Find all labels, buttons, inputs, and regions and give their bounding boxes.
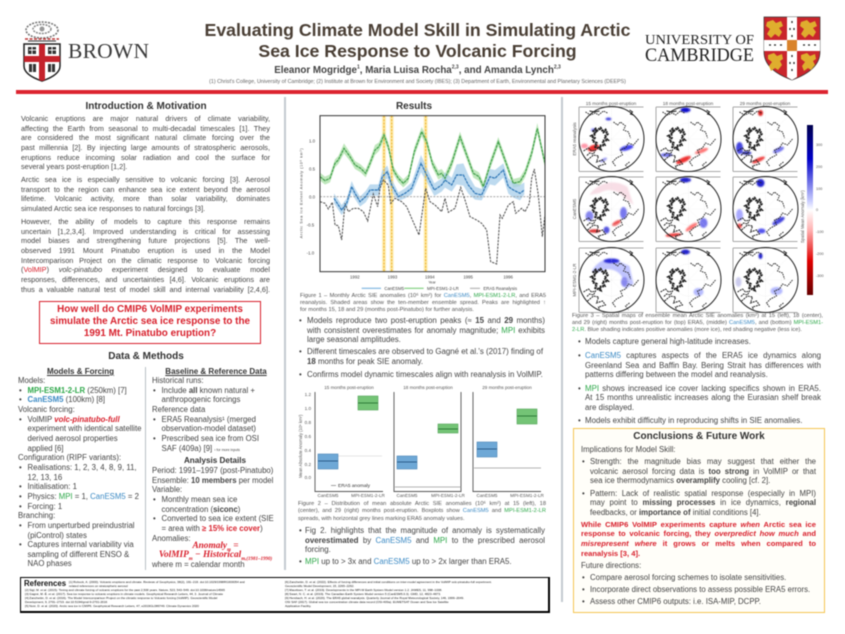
chart: figure 1 time series: CanESM5 bbox=[384, 286, 405, 291]
text: map findings bullets bbox=[578, 337, 822, 426]
colorbar: -100 bbox=[816, 230, 824, 234]
text: models and forcing list: sampling of different ENSO & bbox=[28, 550, 129, 559]
text: key finding bbox=[580, 520, 816, 558]
text: intro paragraph 3: (VolMIP) volc-pinatubo experiment designed to evaluate model bbox=[21, 265, 270, 274]
text: results bullets lower: overestimated by CanESM5 and MPI to the prescribed aerosol bbox=[305, 536, 545, 545]
text: intro paragraph 1: several years post-eruption [1,2]. bbox=[21, 162, 127, 171]
text: intro paragraph 3: responses, differences, and uncertainties [4,6]. Volcanic eruptions are bbox=[21, 275, 270, 284]
heading: Baseline & Reference Data: Baseline & Reference Data bbox=[165, 367, 267, 376]
chart: figure 1 time series: Year bbox=[428, 281, 437, 285]
chart: figure 1 time series: 0.0 bbox=[309, 194, 316, 199]
text: models and forcing list: Realisations: 1, 2, 3, 4, 8, 9, 11, bbox=[28, 463, 137, 472]
chart: figure 2 boxplots: CanESM5 bbox=[477, 493, 498, 498]
chart: figure 2 boxplots: ERA5 anomaly bbox=[338, 483, 371, 489]
text: analysis details list: concentration (siconc) bbox=[162, 505, 240, 514]
text: results bullets upper: Models reproduce two post-eruption peaks (≈ 15 and 29 months) bbox=[307, 316, 545, 325]
text: intro paragraph 3 bbox=[20, 217, 270, 294]
text: models and forcing list: MPI-ESM1-2-LR (250km) [7] bbox=[28, 386, 127, 395]
title: Sea Ice Response to Volcanic Forcing bbox=[258, 40, 577, 60]
chart: figure 2 boxplots: Mean Absolute Anomaly (10⁶ km²) bbox=[298, 414, 303, 478]
heading: Analysis Details: Analysis Details bbox=[184, 456, 246, 465]
caption: figure 3: Figure 3 – Spatial maps of ensemble mean Arctic SIE anomalies (km²) at 15 (left), 18 (center), bbox=[572, 312, 823, 318]
text: analysis details list: Anomalies: bbox=[152, 534, 191, 543]
chart: figure 1 time series: 1994 bbox=[425, 275, 435, 280]
chart: figure 2 boxplots: MPI-ESM1-2-LR bbox=[431, 493, 466, 498]
chart: figure 3 spatial maps bbox=[572, 101, 824, 314]
text: intro paragraph 3: observed 1991 Mount Pinatubo eruption is used in the Model bbox=[21, 246, 270, 255]
header: Brown logo bbox=[22, 20, 149, 82]
column divider left bbox=[284, 97, 286, 570]
text: map findings bullets: Models capture general high-latitude increases. bbox=[585, 337, 751, 346]
authors: Eleanor Mogridge1, Maria Luisa Rocha2,3, and Amanda Lynch2,3 bbox=[274, 65, 561, 76]
text: references right column: Application Facility. bbox=[285, 604, 311, 608]
chart: figure 3 spatial maps: 18 months post-eruption bbox=[663, 101, 714, 106]
chart: figure 2 boxplots: 1.0 bbox=[305, 406, 311, 411]
text: references left column: [1] Robock, A. (2000). Volcanic eruptions and climate. Reviews of Geophysics, 38(2), 191–219. doi:10.1029/1998RG000054 and bbox=[69, 580, 245, 584]
text: analysis details list: = area with ≥ 15% ice cover) bbox=[162, 524, 263, 533]
text: key finding: response to volcanic forcing, they overpredict how much and bbox=[581, 529, 816, 538]
chart: figure 2 boxplots: 15 months post-eruption bbox=[324, 385, 374, 390]
text: implications: volcanic aerosol forcing data is too strong in VolMIP or that bbox=[590, 467, 816, 476]
equation: anomaly formula: Anomalym = bbox=[192, 540, 239, 552]
text: models and forcing list: VolMIP volc-pinatubo-full bbox=[28, 415, 120, 424]
text: references right column: [6] Zanchettin, D. et al. (2022). Effects of forcing differences and initial conditions on inter-model agreement in the VolMIP volc-pinatubo-full experiment. bbox=[285, 580, 492, 584]
callout: research question: simulate the Arctic sea ice response to the bbox=[50, 316, 250, 327]
text: results bullets upper: Confirms model dynamic timescales align with reanalysis in VolMIP. bbox=[307, 370, 543, 379]
text: intro paragraph 3: However, the ability of models to capture this response remains bbox=[21, 217, 270, 226]
text: analysis details list: Period: 1991–1997 (post-Pinatubo) bbox=[152, 466, 273, 475]
chart: figure 1 time series: -1.0 bbox=[307, 250, 315, 255]
chart: figure 2 boxplots: 0.0 bbox=[305, 475, 311, 480]
chart: figure 1 time series: 1992 bbox=[350, 275, 360, 280]
text: models and forcing list: derived aerosol properties bbox=[28, 434, 118, 443]
text: references left column: [3] Gagné, M.-È. et al. (2017). Sea ice response to volcanic eruptions in climate models. Geophysical Research Letters, 44, 3. Journal of Climate bbox=[25, 592, 223, 596]
chart: figure 1 time series: Arctic Sea Ice Extent Anomaly (10⁶ km²) bbox=[298, 148, 303, 238]
panel: conclusions and future work bbox=[573, 428, 825, 613]
text: future directions: Compare aerosol forcing schemes to isolate sensitivities. bbox=[590, 573, 786, 582]
text: references right column: OSI SAF (2017). Global sea ice concentration climate data record (OSI-409a). EUMETSAT Ocean and Sea Ice Satellite bbox=[285, 600, 449, 604]
text: implications: may point to missing processes in ice dynamics, regional bbox=[590, 498, 816, 507]
text: models and forcing list: Initialisation: 1 bbox=[28, 482, 77, 491]
colorbar: 100 bbox=[816, 187, 822, 191]
colorbar: 0 bbox=[816, 208, 818, 212]
chart: figure 2 boxplots: MPI-ESM1-2-LR bbox=[510, 493, 545, 498]
text: intro paragraph 3: thus a valuable natural test of model skill and internal variability [2,4,6]. bbox=[21, 285, 270, 294]
colorbar: -200 bbox=[816, 252, 824, 256]
text: equation note: where m = calendar month bbox=[152, 560, 245, 569]
chart: figure 1 time series: 1993 bbox=[388, 275, 398, 280]
text: references right column: Geoscientific Model Development, 15, 2265–2292. bbox=[285, 584, 354, 588]
chart: figure 2 boxplots: 1.2 bbox=[305, 392, 311, 397]
text: implications: Pattern: Lack of realistic spatial response (especially in MPI) bbox=[590, 489, 816, 498]
text: references left column: related references on stratospheric aerosol bbox=[69, 584, 128, 588]
title: Evaluating Climate Model Skill in Simulating Arctic bbox=[205, 20, 630, 40]
text: future directions: Future directions: bbox=[581, 561, 641, 570]
chart: figure 2 boxplots: 18 months post-eruption bbox=[403, 385, 453, 390]
text: models and forcing list: experiment with identical satellite bbox=[28, 424, 141, 433]
text: intro paragraph 1: past millennia [2]. By injecting large amounts of stratospheric aerosols, bbox=[21, 143, 270, 152]
text: future directions bbox=[580, 561, 810, 606]
text: references right column: [9] Hersbach, H. et al. (2020). The ERA5 global reanalysis. Quarterly Journal of the Royal Meteorological Society, 146, 1999–2049. bbox=[285, 596, 464, 600]
chart: figure 2 boxplots: MPI-ESM1-2-LR bbox=[351, 493, 386, 498]
text: baseline and reference list bbox=[152, 376, 260, 454]
colorbar: -300 bbox=[816, 274, 824, 278]
text: models and forcing list: Branching: bbox=[18, 511, 55, 520]
chart: figure 2 boxplots: 0.8 bbox=[305, 420, 311, 425]
chart: figure 3 spatial maps: 29 months post-eruption bbox=[740, 101, 791, 106]
text: baseline and reference list: ERA5 Reanalysis¹ (merged bbox=[162, 415, 256, 424]
text: key finding: While CMIP6 VolMIP experiments capture when Arctic sea ice bbox=[581, 520, 816, 529]
heading: Data & Methods: Data & Methods bbox=[108, 351, 184, 362]
text: map findings bullets: Greenland Sea and Baffin Bay. Bering Strait has differences with bbox=[585, 361, 821, 370]
text: references left column bbox=[24, 580, 246, 608]
text: intro paragraph 3: uncertain [1,2,3,4]. Improved understanding is critical for assessing bbox=[21, 227, 270, 236]
caption: figure 2: Figure 2 – Distribution of mean absolute Arctic SIE anomalies (10⁶ km²) at 15 (left), 18 bbox=[298, 501, 546, 507]
text: map findings bullets: At 15 months unrealistic increases along the Eurasian shelf break bbox=[585, 393, 821, 402]
chart: figure 2 boxplots: CanESM5 bbox=[397, 493, 418, 498]
heading: Models & Forcing: Models & Forcing bbox=[47, 367, 114, 376]
text: analysis details list: Variable: bbox=[152, 485, 182, 494]
colorbar: 300 bbox=[816, 143, 822, 147]
text: results bullets lower: MPI up to > 3x and CanESM5 up to > 2x larger than ERA5. bbox=[305, 557, 512, 566]
heading: references: References bbox=[24, 579, 66, 588]
text: baseline and reference list: anthropogenic forcings bbox=[162, 395, 240, 404]
text: models and forcing list bbox=[18, 376, 142, 568]
chart: figure 3 spatial maps: 15 months post-eruption bbox=[586, 101, 637, 106]
colorbar bbox=[800, 125, 824, 295]
callout: research question: How well do CMIP6 VolMIP experiments bbox=[57, 304, 243, 314]
callout: research question bbox=[39, 301, 261, 344]
text: intro paragraph 1: affecting the Earth from seasonal to multi-decadal timescales [1]. They bbox=[21, 124, 270, 133]
text: intro paragraph 1: are considered the most significant natural climate forcing over the bbox=[21, 133, 270, 142]
caption: figure 3 bbox=[572, 312, 824, 333]
text: results bullets lower bbox=[298, 526, 546, 566]
map row 3 bbox=[579, 248, 798, 312]
text: references left column: Development, 9, 2701–2719. doi:10.5194/gmd-9-2701-2016 bbox=[25, 600, 107, 604]
caption: figure 2: spreads, with horizontal grey lines marking ERA5 anomaly values. bbox=[298, 516, 465, 522]
text: references left column: [5] Notz, D. et al. (2020). Arctic sea ice in CMIP6. Geophysical Research Letters, 47, e2019GL086749. Climate Dynamics 2020 bbox=[25, 604, 199, 608]
header: Cambridge logo bbox=[644, 16, 822, 81]
column divider right bbox=[561, 97, 562, 602]
text: results bullets upper: 18 months for peak SIE anomaly. bbox=[307, 357, 423, 366]
chart: figure 3 spatial maps: ERA5 reanalysis bbox=[572, 122, 577, 156]
text: references left column: [4] Zanchettin, D. et al. (2016). The Model Intercomparison Project on the climatic response to Volcanic forcing (VolMIP). Geoscientific Model bbox=[25, 596, 217, 600]
text: implications: Implications for Model Skill: bbox=[581, 444, 675, 454]
text: models and forcing list: applied [6] bbox=[28, 444, 63, 453]
chart: figure 1 time series: MPI-ESM1-2-LR bbox=[427, 286, 459, 291]
text: results bullets upper bbox=[298, 316, 546, 380]
text: models and forcing list: Captures internal variability via bbox=[28, 540, 134, 549]
text: analysis details list bbox=[152, 466, 274, 543]
text: intro paragraph 1: eruptions reduce incoming solar radiation and cool the surface for bbox=[21, 153, 270, 162]
text: future directions: Assess other CMIP6 outputs: i.e. ISA-MIP, DCPP. bbox=[590, 597, 761, 606]
chart: figure 2 boxplots: 0.6 bbox=[305, 434, 311, 439]
chart: figure 3 spatial maps: MPI-ESM1-2-LR bbox=[572, 263, 577, 297]
chart: figure 2 boxplots: 0.4 bbox=[305, 448, 311, 453]
caption: figure 2: (center), and 29 (right) months post-eruption. Boxplots show CanESM5 and MPI-ESM1-2-LR bbox=[298, 508, 546, 514]
text: analysis details list: Monthly mean sea ice bbox=[162, 495, 237, 504]
text: intro paragraph 2: lifetime. Volcanic activity, more than solar variability, dominates bbox=[21, 194, 270, 203]
chart: figure 2 boxplots: 29 months post-eruption bbox=[482, 385, 532, 390]
text: baseline and reference list: Historical runs: bbox=[152, 376, 204, 385]
text: results bullets lower: Fig 2. highlights that the magnitude of anomaly is systematically bbox=[305, 526, 545, 535]
text: models and forcing list: (piControl) states bbox=[28, 530, 87, 540]
affiliations: (1) Christ's College, University of Cambridge; (2) Institute at Brown for Environment and Society (IBES); (3) Department of Earth, Environmental and Planetary Sciences (DEEPS) bbox=[209, 78, 626, 84]
text: intro paragraph 2: Arctic sea ice is especially sensitive to volcanic forcing [3]. Aerosol bbox=[21, 175, 270, 184]
text: implications: Strength: the magnitude bias may suggest that either the bbox=[590, 457, 816, 466]
equation: anomaly formula bbox=[159, 540, 273, 562]
callout: research question: 1991 Mt. Pinatubo eruption? bbox=[84, 328, 216, 339]
text: models and forcing list: Volcanic forcing: bbox=[18, 405, 75, 414]
heading: conclusions: Conclusions & Future Work bbox=[633, 431, 765, 442]
text: references right column bbox=[284, 580, 492, 608]
panel: references bbox=[20, 577, 550, 613]
text: baseline and reference list: Prescribed sea ice from OSI bbox=[162, 434, 259, 443]
heading: Introduction & Motivation: Introduction & Motivation bbox=[85, 101, 207, 112]
text: models and forcing list: CanESM5 (100km) [8] bbox=[28, 395, 105, 404]
chart: figure 1 time series: ERA5 Reanalysis bbox=[483, 286, 517, 291]
caption: figure 1: Figure 1 – Monthly Arctic SIE anomalies (10⁶ km²) for CanESM5, MPI-ESM1-2-LR, and ERA5 bbox=[300, 292, 546, 298]
header: Cambridge logo: CAMBRIDGE bbox=[645, 45, 754, 66]
text: models and forcing list: NAO phases bbox=[28, 559, 72, 568]
heading: Results: Results bbox=[396, 101, 432, 112]
chart: figure 1 time series: 1995 bbox=[463, 275, 474, 280]
header: Brown logo: BROWN bbox=[68, 39, 149, 63]
text: map findings bullets: patterns differing between the model and reanalysis. bbox=[585, 370, 768, 379]
text: baseline and reference list: observation-model dataset) bbox=[162, 424, 256, 433]
text: models and forcing list: Forcing: 1 bbox=[28, 502, 62, 511]
text: results bullets upper: Different timescales are observed to Gagné et al.'s (2017) finding of bbox=[307, 347, 543, 356]
text: analysis details list: Ensemble: 10 members per model bbox=[152, 476, 273, 485]
title bbox=[204, 20, 630, 62]
text: intro paragraph 2 bbox=[20, 175, 270, 214]
chart: figure 2 boxplots bbox=[298, 385, 545, 498]
chart: figure 1 time series: 0.5 bbox=[309, 167, 316, 172]
text: references right column: [7] Mauritsen, T. et al. (2019). Developments in the MPI-M Earth System Model version 1.2. JAMES, 11, 998–1038. bbox=[285, 588, 442, 592]
chart: figure 3 spatial maps: CanESM5 bbox=[572, 198, 577, 219]
text: references left column: [2] Sigl, M. et al. (2015). Timing and climate forcing of volcanic eruptions for the past 2,500 years. Nature, 523, 543–549. doi:10.1038/nature14565 bbox=[25, 588, 225, 592]
colorbar: Spatial Mean Anomaly (km²) bbox=[800, 190, 805, 243]
chart: figure 2 boxplots: CanESM5 bbox=[318, 493, 339, 498]
text: baseline and reference list: Reference data bbox=[152, 405, 205, 414]
text: intro paragraph 3: model biases and strengthening future projections [5]. The well- bbox=[21, 236, 270, 245]
text: future directions: Incorporate direct observations to assess possible ERA5 errors. bbox=[590, 585, 810, 594]
map row 2 bbox=[579, 176, 798, 242]
text: analysis details list: Converted to sea ice extent (SIE bbox=[162, 514, 274, 523]
chart: figure 1 time series: 1.0 bbox=[309, 138, 316, 143]
caption: figure 2 bbox=[298, 500, 546, 522]
caption: figure 1: for months 15, 18 and 29 (months post-Pinatubo) for further analysis. bbox=[300, 307, 474, 313]
chart: figure 1 time series: 1996 bbox=[503, 275, 514, 280]
colorbar: 200 bbox=[816, 165, 822, 169]
text: intro paragraph 1: Volcanic eruptions are major natural drivers of climate variability, bbox=[21, 114, 270, 123]
text: key finding: misrepresent where it grows or melts when compared to bbox=[581, 539, 816, 548]
caption: figure 1: reanalysis. Shaded areas show the ten-member ensemble spread. Peaks are highlighted ↑ bbox=[300, 300, 546, 306]
text: implications: feedbacks, or importance of initial conditions [4]. bbox=[590, 508, 761, 517]
text: baseline and reference list: SAF (409a) [9] ¹ for more inputs bbox=[162, 444, 240, 453]
text: implications bbox=[580, 444, 816, 518]
text: references right column: [8] Swart, N. C. et al. (2019). The Canadian Earth System Model version 5 (CanESM5.0.3). GMD, 12, 4823–4873. bbox=[285, 592, 441, 596]
text: models and forcing list: Configuration (RIPF variants): bbox=[18, 453, 121, 462]
text: results bullets upper: with consistent overestimates for anomaly magnitude; MPI exhibits bbox=[307, 326, 545, 335]
text: models and forcing list: Models: bbox=[18, 376, 45, 385]
chart: figure 1 time series: -0.5 bbox=[307, 223, 315, 228]
text: intro paragraph 3: Intercomparison Project on the climatic response to Volcanic forcing bbox=[21, 256, 270, 265]
caption: figure 3: 2-LR. Blue shading indicates positive anomalies (more ice), red shading negative (less ice). bbox=[572, 327, 802, 333]
chart: figure 2 boxplots: 0.2 bbox=[305, 462, 311, 467]
text: intro paragraph 2: simulated Arctic sea ice responses to natural forcings [3]. bbox=[21, 204, 205, 213]
text: models and forcing list: From unperturbed preindustrial bbox=[28, 521, 135, 530]
text: intro paragraph 1 bbox=[20, 114, 270, 172]
equation: anomaly formula: VolMIPm − Historicalm,(1981–1990) bbox=[159, 550, 272, 562]
header: Cambridge logo: UNIVERSITY OF bbox=[645, 33, 754, 48]
text: map findings bullets: MPI shows increased ice cover lacking specifics shown in ERA5. bbox=[585, 384, 821, 393]
text: models and forcing list: 12, 13, 16 bbox=[28, 473, 62, 482]
text: key finding: reanalysis [3, 4]. bbox=[581, 549, 640, 558]
red header rule bbox=[16, 90, 828, 94]
text: intro paragraph 2: transport to the region can enhance sea ice extent beyond the aerosol bbox=[21, 185, 270, 194]
caption: figure 3: and 29 (right) months post-eruption for (top) ERA5, (middle) CanESM5, and (bottom) MPI-ESM1- bbox=[572, 320, 823, 326]
text: baseline and reference list: Include all known natural + bbox=[162, 386, 255, 395]
text: map findings bullets: are displayed. bbox=[585, 403, 634, 412]
caption: figure 1 bbox=[300, 292, 546, 313]
text: implications: sea ice thermodynamics overamplify cooling [cf. 2]. bbox=[590, 476, 770, 485]
map row 1 bbox=[579, 106, 798, 172]
text: models and forcing list: Physics: MPI = 1, CanESM5 = 2 bbox=[28, 492, 139, 501]
chart: figure 1 time series bbox=[298, 114, 546, 292]
text: map findings bullets: Models exhibit difficulty in reproducing shifts in SIE anomalies. bbox=[585, 416, 802, 425]
text: results bullets upper: large seasonal amplitudes. bbox=[307, 335, 401, 344]
text: results bullets lower: forcing. bbox=[305, 545, 331, 554]
text: map findings bullets: CanESM5 captures aspects of the ERA5 ice dynamics along bbox=[585, 351, 821, 360]
divider between method columns bbox=[145, 367, 146, 570]
